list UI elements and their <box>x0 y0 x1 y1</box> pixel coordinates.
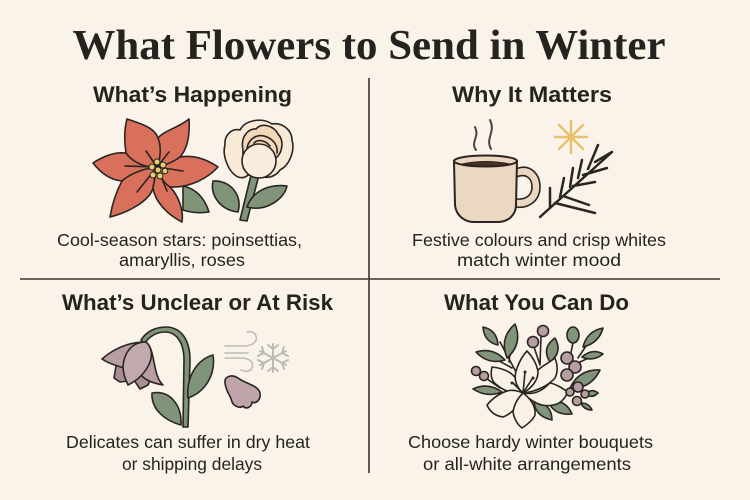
caption: what you can do: or all-white arrangements <box>423 454 631 474</box>
icon: wilted bellflower <box>102 327 213 427</box>
heading: what you can do: What You Can Do <box>444 290 629 315</box>
icon: pine sprig <box>540 145 612 217</box>
icon: snowflake <box>258 344 288 372</box>
heading: why it matters: Why It Matters <box>452 82 612 107</box>
panel: why it matters <box>412 82 666 270</box>
caption: what's happening: amaryllis, roses <box>119 250 245 270</box>
icon: fallen petal <box>225 376 260 408</box>
panel: what's unclear or at risk <box>62 290 334 474</box>
icon: poinsettia <box>93 119 218 222</box>
caption: what's unclear or at risk: Delicates can suffer in dry heat <box>66 432 310 452</box>
caption: what's unclear or at risk: or shipping delays <box>122 454 262 474</box>
title: What Flowers to Send in Winter <box>72 23 666 69</box>
caption: why it matters: Festive colours and crisp whites <box>412 230 666 250</box>
panel: what you can do <box>408 290 653 474</box>
caption: what you can do: Choose hardy winter bouquets <box>408 432 653 452</box>
caption: what's happening <box>57 230 302 270</box>
caption: what you can do <box>408 432 653 474</box>
heading: what's happening: What’s Happening <box>93 82 292 107</box>
caption: what's unclear or at risk <box>66 432 310 474</box>
caption: why it matters: match winter mood <box>457 250 621 270</box>
caption: what's happening: Cool-season stars: poinsettias, <box>57 230 302 250</box>
icon: wind <box>225 332 256 371</box>
icon: coffee mug with steam <box>454 120 540 222</box>
panel: what's happening <box>57 82 302 270</box>
caption: why it matters <box>412 230 666 270</box>
icon: peony <box>212 120 293 221</box>
heading: what's unclear or at risk: What’s Unclear or At Risk <box>62 290 334 315</box>
icon: winter sparkle <box>555 121 587 153</box>
icon: white winter bouquet <box>472 324 603 428</box>
